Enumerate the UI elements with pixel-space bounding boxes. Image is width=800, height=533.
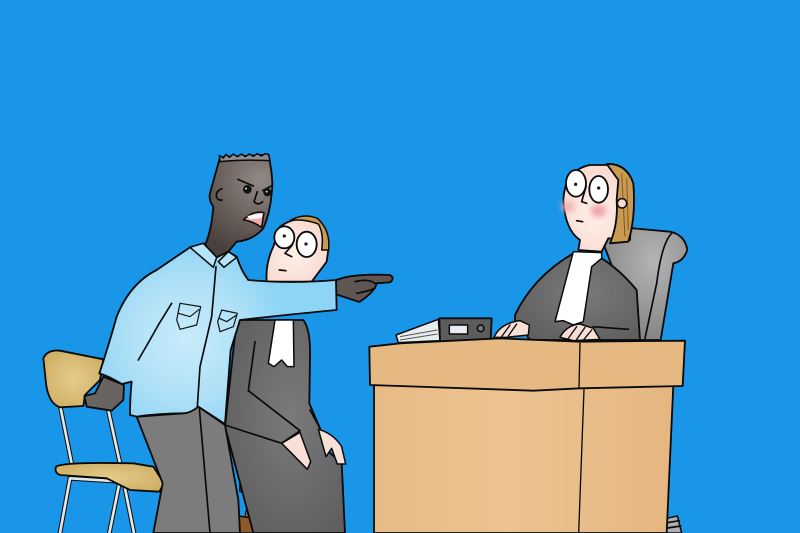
- defendant head: [205, 154, 272, 258]
- judge hands: [494, 321, 600, 341]
- binder: [396, 318, 492, 343]
- judge glasses: [566, 170, 586, 197]
- wheel: [667, 516, 682, 533]
- judge hair: [607, 164, 634, 243]
- lawyer: [225, 216, 346, 533]
- lawyer glasses: [274, 226, 294, 248]
- pants: [137, 407, 240, 533]
- lawyer bands: [268, 320, 294, 367]
- judge head: [562, 164, 634, 252]
- lawyer hands: [282, 432, 311, 469]
- chair: [43, 350, 249, 533]
- pockets: [177, 303, 201, 329]
- judge bib: [555, 252, 602, 325]
- lawyer hair: [290, 216, 329, 250]
- left group: defendant, lawyer and chair: [43, 154, 393, 533]
- desk: [369, 338, 685, 533]
- shirt: [99, 243, 337, 424]
- briefcase: [238, 504, 293, 533]
- judge chair: [603, 228, 687, 340]
- right group: judge, desk and binder: [369, 164, 687, 533]
- judge ear: [617, 199, 627, 208]
- lawyer robe: [225, 320, 345, 533]
- collar: [190, 243, 237, 267]
- pointing hand: [335, 275, 393, 302]
- judge robe: [515, 253, 640, 340]
- resting hand: [84, 377, 124, 411]
- lawyer head: [266, 218, 328, 282]
